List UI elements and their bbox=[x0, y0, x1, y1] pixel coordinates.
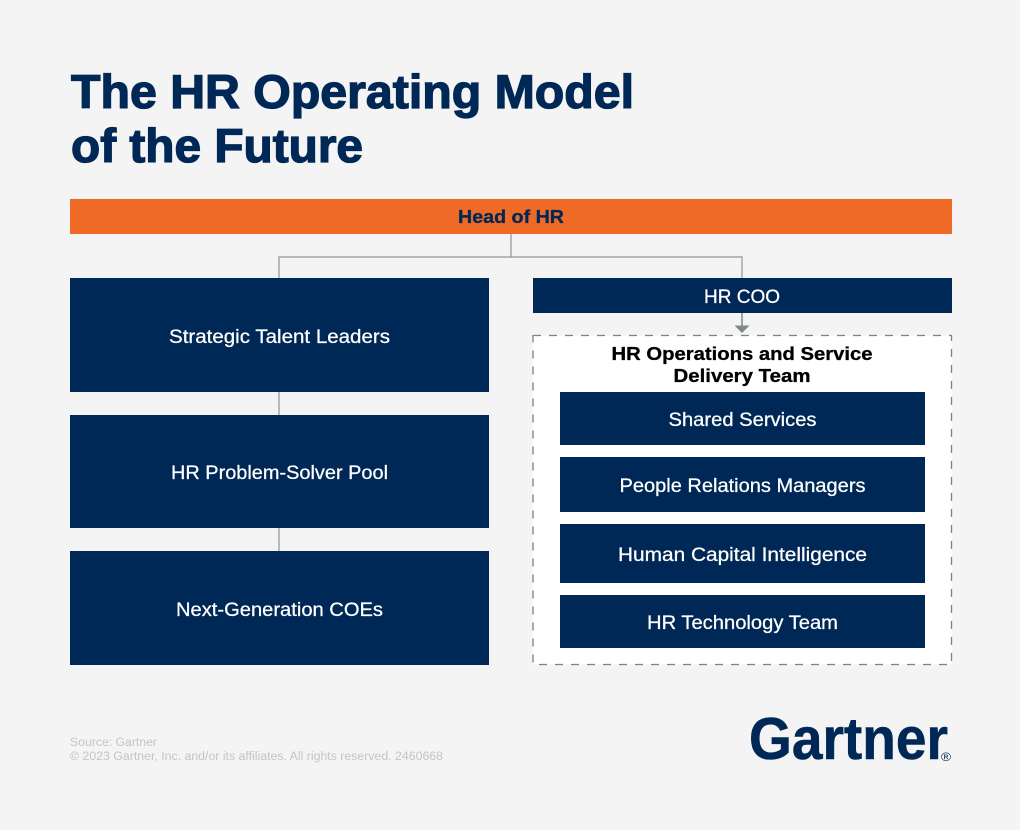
arrow: HR COO to operations team bbox=[734, 313, 750, 333]
source note: © 2023 Gartner, Inc. and/or its affiliates. All rights reserved. 2460668 bbox=[70, 751, 443, 763]
box: HR technology team: HR Technology Team bbox=[647, 613, 838, 634]
panel: head of HR: Head of HR bbox=[458, 207, 564, 227]
box: human capital intelligence bbox=[560, 524, 925, 583]
panel: strategic talent leaders: Strategic Talent Leaders bbox=[169, 327, 390, 348]
panel: strategic talent leaders bbox=[70, 278, 489, 392]
team heading: Delivery Team bbox=[674, 365, 810, 386]
title: of the Future bbox=[71, 119, 363, 172]
panel: HR problem-solver pool bbox=[70, 415, 489, 528]
source note bbox=[70, 737, 443, 763]
panel: HR problem-solver pool: HR Problem-Solver Pool bbox=[171, 463, 388, 484]
title: The HR Operating Model bbox=[71, 65, 634, 118]
panel: next-generation COEs bbox=[70, 551, 489, 665]
box: people relations managers bbox=[560, 457, 925, 512]
box: HR technology team bbox=[560, 595, 925, 648]
panel: HR COO bbox=[533, 278, 952, 313]
box: shared services bbox=[560, 392, 925, 445]
team heading: HR Operations and Service bbox=[612, 343, 872, 364]
logo: Gartner: Gartner bbox=[749, 706, 948, 772]
team heading bbox=[612, 343, 872, 386]
panel: next-generation COEs: Next-Generation COEs bbox=[176, 600, 383, 621]
box: shared services: Shared Services bbox=[668, 410, 816, 431]
connector lines bbox=[279, 234, 742, 551]
box: human capital intelligence: Human Capital Intelligence bbox=[618, 545, 867, 566]
panel: HR COO: HR COO bbox=[704, 287, 780, 308]
logo: Gartner: ® bbox=[941, 750, 951, 764]
title bbox=[71, 65, 634, 172]
panel: head of HR bbox=[70, 199, 952, 234]
source note: Source: Gartner bbox=[70, 737, 157, 749]
box: people relations managers: People Relations Managers bbox=[620, 476, 866, 497]
panel: HR operations and service delivery team bbox=[533, 336, 952, 664]
